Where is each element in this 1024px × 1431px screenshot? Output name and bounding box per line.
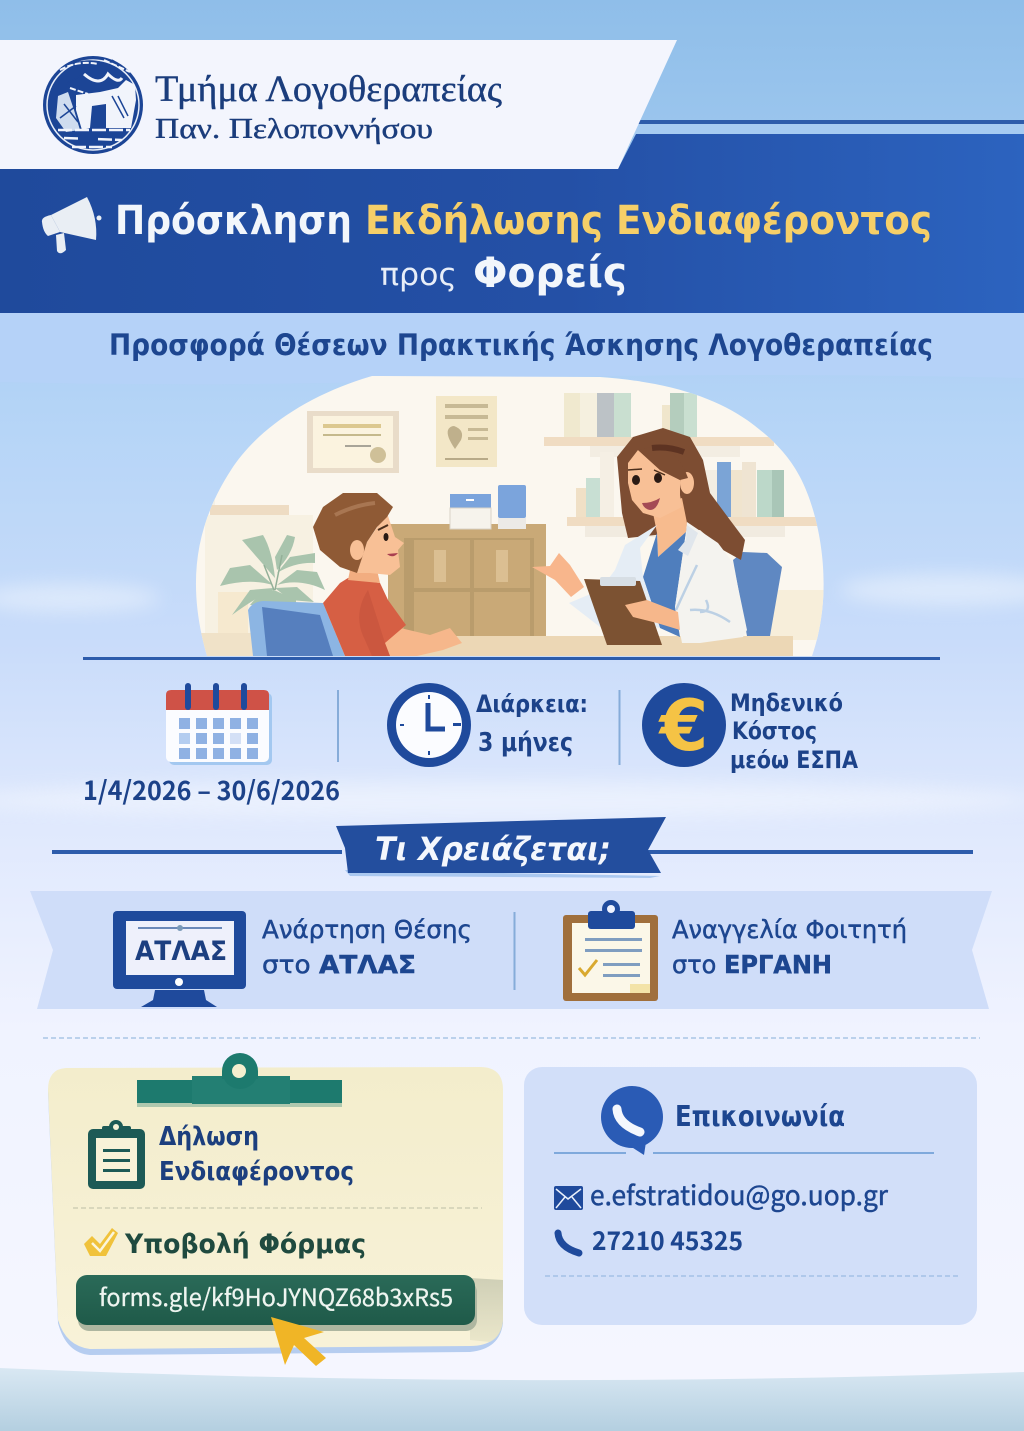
form link button [76, 1275, 477, 1331]
child [313, 493, 462, 656]
therapist's chair [733, 552, 782, 636]
ERGANI text: στο ΕΡΓΑΝΗ [672, 950, 832, 979]
icon: megaphone [42, 197, 102, 253]
ATLAS text: στο ΑΤΛΑΣ [262, 950, 416, 979]
icon: euro: € [658, 685, 708, 767]
form link button: forms.gle/kf9HoJYNQZ68b3xRs5 [99, 1278, 453, 1313]
icon: calendar [166, 683, 272, 765]
icon: clipboard ERGANI [563, 900, 658, 1001]
subtitle: Προσφορά Θέσεων Πρακτικής Άσκησης Λογοθεραπείας [109, 328, 933, 362]
university logo [43, 56, 143, 154]
cost text: Μηδενικό [730, 689, 843, 717]
cost text: μεόω ΕΣΠΑ [730, 746, 858, 774]
form label: Υποβολή Φόρμας [124, 1229, 366, 1260]
cabinet [388, 524, 546, 636]
dates: 1/4/2026 – 30/6/2026 [83, 771, 340, 808]
contact heading: Επικοινωνία [675, 1100, 845, 1133]
email: e.efstratidou@go.uop.gr [590, 1174, 889, 1213]
title [115, 198, 932, 297]
ATLAS text: Ανάρτηση Θέσης [262, 915, 472, 944]
subtitle band [0, 313, 1024, 384]
bottom band [0, 1368, 1024, 1431]
duration text: 3 μήνες [478, 728, 573, 758]
department name: Τμήμα Λογοθεραπείας [155, 69, 502, 110]
heading text: Ενδιαφέροντος [159, 1157, 354, 1187]
icon: check [84, 1228, 118, 1256]
icon: phone [558, 1233, 579, 1253]
panel: expression of interest [48, 1053, 503, 1366]
phone number: 27210 45325 [592, 1221, 743, 1258]
department name [155, 69, 502, 145]
title: Πρόσκληση [115, 198, 352, 244]
duration text [476, 690, 588, 758]
top band with line [630, 120, 1024, 136]
section heading lines [52, 850, 973, 854]
bookshelves [544, 393, 820, 537]
header blue banner [0, 134, 1024, 313]
contact heading line [554, 1152, 934, 1154]
shelf left [210, 505, 289, 515]
icon: monitor ATLAS: ΑΤΛΑΣ [135, 936, 227, 967]
requirements band [30, 891, 992, 1009]
title: Φορείς [473, 248, 627, 297]
icon: form clipboard [88, 1120, 145, 1189]
cost text: Κόστος [732, 717, 817, 745]
poster [436, 396, 497, 467]
white logo banner [0, 40, 677, 169]
ERGANI text: Αναγγελία Φοιτητή [672, 915, 907, 944]
heading text [159, 1122, 354, 1187]
duration text: Διάρκεια: [476, 690, 588, 718]
department name: Παν. Πελοποννήσου [155, 114, 433, 145]
cost text [730, 689, 858, 774]
heading text: Δήλωση [159, 1122, 259, 1152]
child's chair [248, 601, 345, 656]
desk [385, 636, 793, 656]
ribbon heading: Τι Χρειάζεται; [375, 830, 611, 868]
ribbon heading [336, 817, 666, 878]
clip [137, 1053, 342, 1107]
title: Εκδήλωσης Ενδιαφέροντος [365, 198, 932, 244]
certificate [307, 411, 399, 473]
icon: mail [554, 1186, 583, 1210]
icon: clock [387, 683, 471, 767]
illustration: speech therapist with child [180, 370, 840, 660]
icon: cursor arrow [271, 1317, 326, 1366]
icon: monitor ATLAS [113, 911, 246, 1007]
boxes [450, 485, 526, 529]
ERGANI text [672, 915, 907, 979]
panel: contact [524, 1067, 977, 1325]
divider line [83, 657, 940, 660]
title: προς [380, 257, 457, 293]
icon: phone bubble [601, 1086, 663, 1155]
plant [220, 535, 325, 615]
therapist [532, 428, 747, 645]
icon: euro [642, 683, 726, 767]
ATLAS text [262, 915, 472, 979]
